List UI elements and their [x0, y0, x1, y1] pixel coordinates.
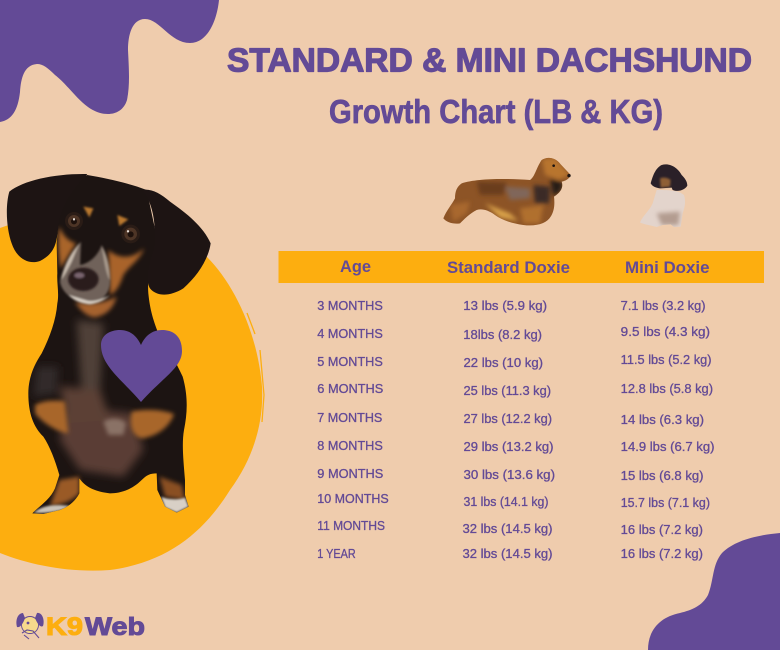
header: age: Age: [340, 257, 371, 276]
title: STANDARD & MINI DACHSHUND: [227, 42, 752, 78]
row: 11 months: 16 lbs (7.2 kg): [621, 523, 703, 537]
photo: mini dachshund puppy: [640, 164, 687, 227]
row: 6 months: [317, 382, 713, 398]
row: 7 months: 7 MONTHS: [317, 411, 382, 425]
icon: right eye: [121, 225, 140, 243]
row: 3 months: 13 lbs (5.9 kg): [463, 299, 547, 313]
photo: black and tan dachshund: [7, 174, 211, 514]
header: mini doxie: Mini Doxie: [625, 258, 710, 277]
logo: K9 Web: Web: [85, 613, 145, 641]
row: 7 months: 14 lbs (6.3 kg): [621, 413, 704, 427]
row: 4 months: [317, 325, 710, 342]
row: 11 months: 11 MONTHS: [317, 519, 385, 533]
row: 3 months: [317, 299, 706, 313]
row: 6 months: 25 lbs (11.3 kg): [464, 384, 551, 398]
header: standard doxie: Standard Doxie: [447, 258, 570, 277]
row: 1 year: 16 lbs (7.2 kg): [621, 547, 703, 561]
row: 5 months: 11.5 lbs (5.2 kg): [621, 353, 712, 367]
icon: logo dog: [16, 613, 44, 639]
row: 7 months: [317, 411, 704, 427]
row: 9 months: 9 MONTHS: [317, 467, 383, 481]
icon: nose: [68, 268, 99, 291]
row: 8 months: 8 MONTHS: [317, 439, 383, 453]
row: 6 months: 6 MONTHS: [317, 382, 383, 396]
row: 4 months: 9.5 lbs (4.3 kg): [621, 325, 710, 339]
row: 6 months: 12.8 lbs (5.8 kg): [621, 382, 713, 396]
logo: K9 Web: K9: [46, 613, 83, 641]
row: 11 months: 32 lbs (14.5 kg): [462, 522, 552, 536]
icon: left ear: [7, 174, 87, 262]
row: 4 months: 4 MONTHS: [317, 327, 383, 341]
row: 5 months: 5 MONTHS: [317, 355, 383, 369]
icon: right ear: [142, 190, 211, 295]
row: 10 months: 10 MONTHS: [317, 492, 389, 506]
row: 8 months: [317, 439, 714, 454]
row: 10 months: 15.7 lbs (7.1 kg): [621, 496, 710, 510]
row: 3 months: 3 MONTHS: [317, 299, 383, 313]
icon: purple heart: [101, 330, 182, 402]
row: 1 year: 32 lbs (14.5 kg): [462, 547, 552, 561]
table header bar: [278, 251, 764, 283]
row: 10 months: 31 lbs (14.1 kg): [464, 495, 548, 509]
row: 9 months: 30 lbs (13.6 kg): [464, 468, 555, 482]
row: 5 months: [317, 353, 712, 370]
row: 9 months: 15 lbs (6.8 kg): [621, 469, 704, 483]
icon: left eye: [65, 212, 83, 230]
row: 4 months: 18lbs (8.2 kg): [463, 328, 542, 342]
row: 1 year: [317, 547, 703, 561]
row: 7 months: 27 lbs (12.2 kg): [464, 412, 552, 426]
subtitle: Growth Chart (LB & KG): [329, 93, 663, 130]
row: 3 months: 7.1 lbs (3.2 kg): [621, 299, 706, 313]
row: 1 year: 1 YEAR: [317, 547, 356, 561]
orange brush circle: [0, 218, 264, 571]
decorative blob: top left: [0, 0, 219, 122]
photo: long-haired standard dachshund: [443, 157, 571, 225]
decorative blob: bottom right: [648, 533, 780, 650]
row: 10 months: [317, 492, 710, 510]
logo: K9 Web: [16, 613, 145, 641]
row: 5 months: 22 lbs (10 kg): [464, 356, 543, 370]
row: 8 months: 29 lbs (13.2 kg): [464, 440, 554, 454]
row: 11 months: [317, 519, 703, 537]
row: 8 months: 14.9 lbs (6.7 kg): [621, 440, 714, 454]
row: 9 months: [317, 467, 704, 483]
